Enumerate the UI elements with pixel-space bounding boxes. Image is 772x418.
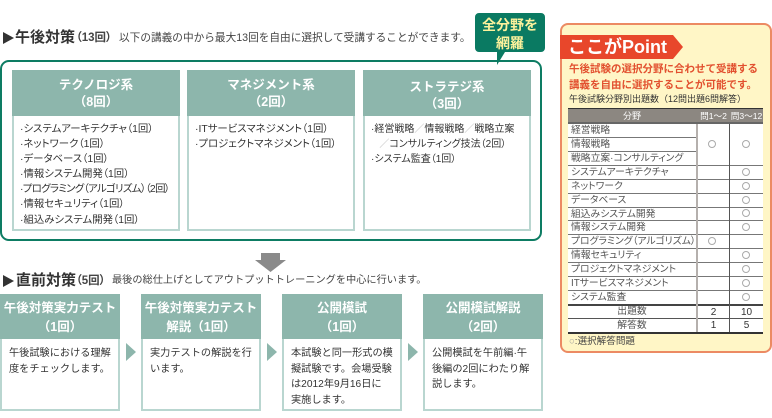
course list	[371, 123, 514, 165]
table: 1	[711, 320, 716, 331]
card header	[282, 294, 402, 339]
arrow: step 3	[408, 343, 418, 361]
table: システムアーキテクチャ	[571, 167, 669, 178]
table: 5	[744, 320, 749, 331]
card text: 擬試験です。会場受験	[291, 364, 392, 374]
card header	[141, 294, 261, 339]
heading: final preparation: （5回）	[76, 275, 105, 287]
card text: は2012年9月16日に	[291, 379, 382, 390]
card header	[423, 294, 543, 339]
course list: ·システムアーキテクチャ（1回）	[20, 124, 153, 135]
badge: all fields covered: 網羅	[496, 35, 524, 51]
card header: （3回）	[425, 97, 469, 111]
card: mock exam review	[423, 294, 543, 411]
card header: （1回）	[320, 320, 364, 334]
card text	[432, 347, 529, 390]
point text: 午後試験の選択分野に合わせて受講する	[569, 63, 758, 75]
badge: all fields covered: 全分野を	[482, 17, 538, 33]
arrow: step 1	[126, 343, 136, 361]
course list: ／コンサルティング技法（2回）	[379, 139, 506, 150]
card: strategy	[363, 70, 531, 231]
card text: 公開模試を午前編·午	[432, 348, 527, 359]
table: プロジェクトマネジメント	[571, 264, 676, 275]
card header: テクノロジ系	[59, 78, 133, 92]
card: public mock exam	[282, 294, 402, 411]
course list: ·プロジェクトマネジメント（1回）	[195, 139, 336, 150]
card text	[150, 347, 252, 374]
card header	[12, 70, 180, 116]
card header	[363, 70, 531, 116]
heading marker	[3, 275, 14, 287]
course list: ·プログラミング（アルゴリズム）（2回）	[20, 184, 169, 195]
card: practice test	[0, 294, 120, 411]
heading: afternoon section: （13回）	[76, 32, 112, 44]
card: technology	[12, 70, 180, 231]
card text: 実力テストの解説を行	[150, 348, 252, 359]
heading: afternoon section: 午後対策	[15, 29, 75, 46]
table legend: ○:選択解答問題	[569, 336, 635, 347]
column dividers	[696, 124, 698, 332]
card text: 後編の2回にわたり解	[432, 364, 529, 374]
table rows: 経営戦略	[571, 125, 610, 136]
course list: ·データベース（1回）	[20, 154, 109, 165]
badge: all fields covered	[475, 13, 545, 65]
table: 問3～12	[731, 111, 762, 121]
card text: 説します。	[432, 379, 482, 390]
course list: ·ネットワーク（1回）	[20, 139, 105, 150]
course list: ·システム監査（1回）	[371, 154, 456, 165]
card text: 午後試験における理解	[9, 348, 111, 359]
card header: （2回）	[461, 320, 505, 334]
course list	[20, 123, 169, 226]
card text: 度をチェックします。	[9, 364, 110, 374]
table: 情報セキュリティ	[571, 250, 641, 261]
heading: afternoon section: 以下の講義の中から最大13回を自由に選択して受講することができます。	[119, 32, 470, 44]
table: システム監査	[571, 292, 626, 303]
banner	[560, 35, 683, 59]
heading: final preparation: 最後の総仕上げとしてアウトプットトレーニングを中心に行います。	[112, 275, 426, 286]
table: 解答数	[617, 320, 647, 331]
card header: （2回）	[249, 95, 293, 109]
card header: （1回）	[38, 320, 82, 334]
arrow: step 2	[267, 343, 277, 361]
card header: 午後対策実力テスト	[145, 301, 257, 315]
course list: ·ITサービスマネジメント（1回）	[195, 124, 329, 135]
card header: 解説（1回）	[166, 320, 236, 334]
panel: afternoon courses	[0, 60, 542, 241]
table rows	[568, 124, 696, 138]
table: プログラミング（アルゴリズム）	[571, 236, 696, 247]
table: 情報戦略	[571, 139, 610, 150]
table: 問1～2	[700, 111, 727, 121]
table header	[568, 109, 763, 124]
table: 分野	[623, 111, 641, 121]
card text: 実施します。	[291, 394, 351, 406]
table caption: 午後試験分野別出題数（12問出題6問解答）	[569, 94, 746, 104]
card: management	[187, 70, 355, 231]
totals	[568, 318, 763, 319]
card header	[0, 294, 120, 339]
card: practice test review	[141, 294, 261, 411]
banner: ここがPoint	[568, 37, 667, 57]
table: 2	[711, 307, 716, 318]
card header: 公開模試	[317, 301, 367, 315]
heading: final preparation	[3, 272, 426, 289]
card text	[291, 347, 393, 406]
card header: ストラテジ系	[409, 80, 484, 94]
course list: ·情報システム開発（1回）	[20, 169, 129, 180]
card header: 公開模試解説	[445, 301, 520, 315]
heading: final preparation: 直前対策	[16, 272, 76, 289]
card header: マネジメント系	[227, 78, 315, 92]
card text: 本試験と同一形式の模	[291, 348, 393, 359]
card header: 午後対策実力テスト	[4, 301, 116, 315]
point text	[569, 63, 758, 91]
card text: います。	[150, 364, 190, 374]
course list: ·組込みシステム開発（1回）	[20, 215, 140, 226]
point text: 講義を自由に選択することが可能です。	[569, 79, 757, 91]
table: 情報システム開発	[571, 222, 646, 233]
table: 組込みシステム開発	[571, 209, 655, 220]
arrow: down	[255, 253, 286, 272]
table: ネットワーク	[571, 181, 623, 192]
table: 10	[741, 307, 752, 318]
heading marker	[3, 32, 14, 44]
course list	[195, 123, 336, 150]
table: 戦略立案·コンサルティング	[571, 153, 683, 164]
card header: （8回）	[74, 95, 118, 109]
selection marks	[708, 140, 716, 148]
course list: ·経営戦略／情報戦略／戦略立案	[371, 124, 514, 135]
table: ITサービスマネジメント	[571, 278, 669, 289]
table: 出題数	[617, 306, 647, 317]
card header	[187, 70, 355, 116]
heading: afternoon section	[3, 29, 470, 46]
course list: ·情報セキュリティ（1回）	[20, 199, 125, 210]
panel: point	[560, 23, 772, 353]
table	[568, 108, 763, 333]
card text	[9, 347, 111, 374]
table: データベース	[571, 195, 626, 206]
